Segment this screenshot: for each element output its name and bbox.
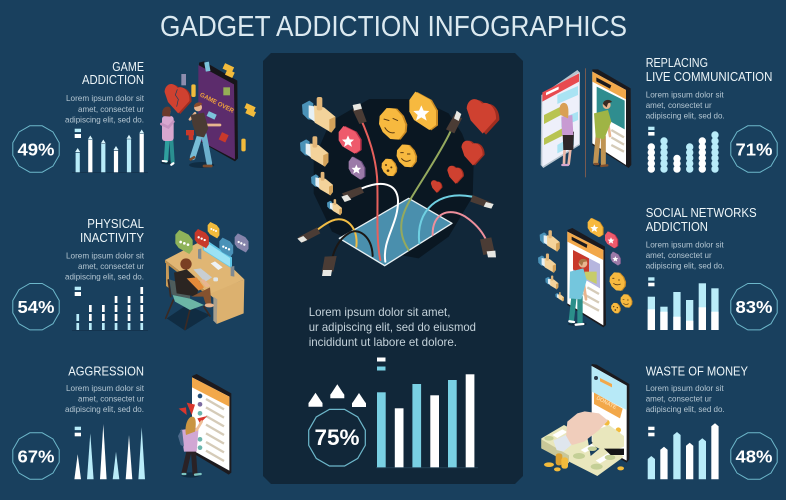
- body text: [65, 93, 145, 124]
- panel: replacing live communication: [541, 56, 777, 177]
- body text: Lorem ipsum dolor sit: [646, 240, 724, 250]
- body text: [65, 250, 145, 282]
- panel: waste of money: [541, 364, 777, 479]
- man: [189, 162, 214, 168]
- body text: [646, 240, 725, 270]
- up arrows: [308, 384, 366, 407]
- heading: LIVE COMMUNICATION: [646, 70, 772, 84]
- illustration: person at desk: [165, 222, 249, 331]
- percentage: 75%: [309, 409, 365, 466]
- centre body text: [309, 306, 476, 349]
- body text: amet, consectet ur: [78, 394, 144, 404]
- percentage: [13, 284, 59, 330]
- illustration: phone with social icons: [538, 218, 633, 327]
- percentage: 83%: [736, 297, 773, 317]
- body text: [646, 383, 725, 414]
- arrow bar chart: [648, 423, 719, 479]
- percentage: [731, 126, 777, 172]
- percentage: 49%: [18, 140, 55, 160]
- illustration: woman at phone: [178, 374, 231, 478]
- body text: adipiscing elit, sed do.: [646, 404, 725, 414]
- percentage: [13, 126, 59, 172]
- body text: amet, consectet ur: [646, 394, 712, 404]
- panel: social networks addiction: [538, 206, 777, 330]
- bar chart: [72, 129, 148, 173]
- heading: ADDICTION: [646, 220, 708, 234]
- bar chart: centre: [376, 358, 478, 468]
- body text: Lorem ipsum dolor sit: [646, 90, 724, 100]
- dot chart: [648, 127, 719, 173]
- percentage: 67%: [18, 446, 55, 466]
- panel: game addiction: [13, 60, 256, 173]
- body text: Lorem ipsum dolor sit: [66, 250, 145, 260]
- percentage: 71%: [736, 140, 773, 160]
- centre panel background: [263, 53, 523, 484]
- heading: REPLACING: [646, 56, 708, 70]
- illustration: game over phone with players: [161, 61, 256, 168]
- illustration: woman with tablet and man with phone: [541, 68, 631, 177]
- body text: amet, consectet ur: [78, 104, 144, 114]
- body text: adipiscing elit, sed do.: [65, 272, 144, 282]
- heading: INACTIVITY: [80, 231, 145, 245]
- body text: [65, 383, 145, 414]
- panel: aggression: [13, 364, 231, 479]
- heading: GAME: [112, 60, 144, 74]
- percentage: [13, 433, 59, 479]
- body text: [646, 90, 725, 120]
- illustration: game over phone with players: GAME OVER: [198, 92, 235, 115]
- body text: adipiscing elit, sed do.: [65, 404, 144, 414]
- bar chart: [72, 287, 148, 330]
- body text: adipiscing elit, sed do.: [65, 114, 144, 124]
- panel: centre: [263, 53, 523, 484]
- illustration: hand, phone and money: DONATE: [595, 395, 617, 411]
- centre illustration: cables and icons: [297, 92, 499, 276]
- heading: [646, 206, 757, 234]
- percentage: 54%: [18, 297, 55, 317]
- percentage: [731, 284, 777, 330]
- spike chart: [74, 424, 145, 479]
- percentage: 75%: 75%: [314, 425, 360, 450]
- body text: amet, consectet ur: [78, 261, 144, 271]
- heading: SOCIAL NETWORKS: [646, 206, 757, 220]
- body text: Lorem ipsum dolor sit: [66, 383, 145, 393]
- body text: amet, consectet ur: [646, 250, 712, 260]
- centre body text: ur adipiscing elit, sed do eiusmod: [309, 321, 476, 334]
- body text: amet, consectet ur: [646, 100, 712, 110]
- title: GADGET ADDICTION INFOGRAPHICS: [160, 11, 627, 43]
- heading: [82, 60, 144, 87]
- heading: ADDICTION: [82, 73, 144, 87]
- percentage: 48%: [736, 446, 773, 466]
- body text: Lorem ipsum dolor sit: [66, 93, 145, 103]
- heading: [646, 56, 772, 84]
- heading: PHYSICAL: [87, 217, 144, 231]
- heading: [80, 217, 145, 245]
- body text: adipiscing elit, sed do.: [646, 110, 725, 120]
- panel: physical inactivity: [13, 217, 249, 331]
- centre body text: incididunt ut labore et dolore.: [309, 336, 457, 349]
- illustration: hand, phone and money: [541, 364, 629, 476]
- body text: Lorem ipsum dolor sit: [646, 383, 724, 393]
- heading: WASTE OF MONEY: [646, 364, 749, 378]
- woman: [161, 102, 220, 168]
- centre body text: Lorem ipsum dolor sit amet,: [309, 306, 450, 319]
- stacked bar chart: [648, 277, 719, 330]
- body text: adipiscing elit, sed do.: [646, 260, 725, 270]
- percentage: [731, 433, 777, 479]
- heading: AGGRESSION: [68, 364, 144, 378]
